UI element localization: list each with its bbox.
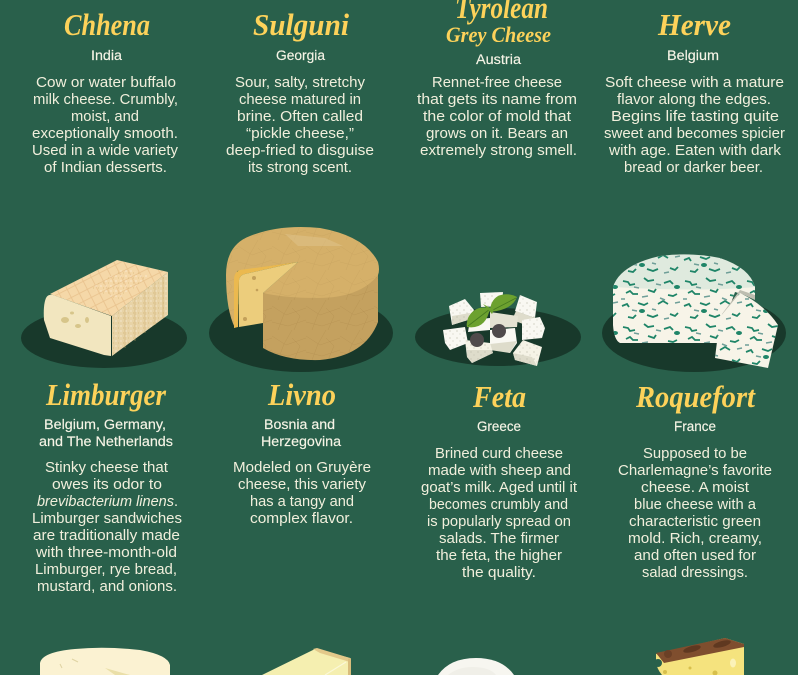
- description: Limburger: owes its odor to: [52, 477, 162, 493]
- origin: Bosnia and Herzegovina: [261, 417, 342, 449]
- description: Livno: complex flavor.: [250, 511, 353, 527]
- description: Herve: flavor along the edges.: [617, 92, 771, 108]
- description: Feta: goat’s milk. Aged until it: [421, 480, 577, 496]
- description: Roquefort: [618, 446, 772, 581]
- description: Sulguni: brine. Often called: [237, 109, 363, 125]
- origin: India: India: [91, 48, 123, 63]
- panel: Tyrolean Grey Cheese: [417, 0, 577, 159]
- illustration: Livno wheel: [209, 227, 393, 372]
- description: Roquefort: characteristic green: [629, 514, 761, 530]
- description: Feta: the quality.: [462, 565, 536, 581]
- description: Feta: [421, 446, 577, 581]
- description: Limburger: Limburger, rye bread,: [35, 562, 177, 578]
- description: Livno: cheese, this variety: [238, 477, 367, 493]
- origin: Bosnia and Herzegovina: Bosnia and: [264, 417, 335, 432]
- description: Sulguni: its strong scent.: [248, 160, 352, 176]
- description: Livno: Modeled on Gruyère: [233, 460, 371, 476]
- description: Feta: is popularly spread on: [427, 514, 571, 530]
- panel: Chhena: [32, 7, 179, 176]
- description: Tyrolean Grey Cheese: Rennet-free cheese: [432, 75, 562, 91]
- description: Tyrolean Grey Cheese: extremely strong smell.: [420, 143, 577, 159]
- description: Limburger: brevibacterium linens.: [37, 494, 178, 510]
- description: Roquefort: Charlemagne’s favorite: [618, 463, 772, 479]
- description: Roquefort: and often used for: [634, 548, 756, 564]
- description: Tyrolean Grey Cheese: the color of mold that: [423, 109, 571, 125]
- description: Limburger: [32, 460, 182, 595]
- heading: Livno: Livno: [267, 377, 336, 412]
- description: Limburger: are traditionally made: [33, 528, 180, 544]
- heading: Sulguni: Sulguni: [253, 7, 349, 42]
- description: Chhena: of Indian desserts.: [44, 160, 167, 176]
- illustration: Feta cubes with basil and olives: [415, 292, 581, 366]
- heading: Tyrolean Grey Cheese: Grey Cheese: [446, 22, 551, 47]
- description: Sulguni: cheese matured in: [239, 92, 361, 108]
- description: Sulguni: Sour, salty, stretchy: [235, 75, 366, 91]
- description: Herve: with age. Eaten with dark: [608, 143, 782, 159]
- description: Feta: the feta, the higher: [436, 548, 562, 564]
- description: Sulguni: [226, 75, 374, 176]
- description: Tyrolean Grey Cheese: [417, 75, 577, 159]
- panel: Livno: [209, 227, 393, 527]
- description: Chhena: Cow or water buffalo: [36, 75, 176, 91]
- description: Limburger: Stinky cheese that: [45, 460, 168, 476]
- heading: Roquefort: Roquefort: [635, 379, 756, 414]
- description: Livno: has a tangy and: [250, 494, 354, 510]
- origin: Belgium: Belgium: [667, 48, 719, 63]
- heading: Limburger: Limburger: [45, 377, 167, 412]
- panel: Herve: [604, 7, 785, 176]
- description: Chhena: milk cheese. Crumbly,: [33, 92, 178, 108]
- description: Limburger: Limburger sandwiches: [32, 511, 182, 527]
- origin: Georgia: Georgia: [276, 48, 325, 63]
- description: Livno: [233, 460, 371, 527]
- illustration: white round cheese (cropped): [438, 658, 514, 675]
- description: Sulguni: deep-fried to disguise: [226, 143, 374, 159]
- illustration: pale round cheese (cropped): [40, 648, 170, 675]
- description: Roquefort: cheese. A moist: [641, 480, 749, 496]
- heading: Feta: Feta: [472, 379, 526, 414]
- description: Herve: [604, 75, 785, 176]
- panel: Sulguni: [226, 7, 374, 176]
- panel: Feta: [415, 292, 581, 581]
- description: Limburger: with three-month-old: [35, 545, 177, 561]
- illustration: Swiss-style block (cropped): [654, 638, 744, 675]
- origin: Belgium, Germany, and The Netherlands: [39, 417, 173, 449]
- description: Roquefort: salad dressings.: [642, 565, 748, 581]
- description: Roquefort: blue cheese with a: [634, 497, 757, 513]
- description: Feta: made with sheep and: [428, 463, 571, 479]
- panel: Limburger: [21, 260, 187, 595]
- description: Herve: bread or darker beer.: [624, 160, 763, 176]
- origin: Belgium, Germany, and The Netherlands: Belgium, Germany,: [44, 417, 166, 432]
- description: Chhena: Used in a wide variety: [32, 143, 179, 159]
- description: Chhena: moist, and: [71, 109, 139, 125]
- description: Herve: Begins life tasting quite: [611, 109, 779, 125]
- illustration: cheese wedge (cropped): [262, 648, 351, 675]
- illustration: Roquefort wheel and wedge: [602, 254, 786, 372]
- heading: Tyrolean Grey Cheese: [446, 0, 551, 47]
- description: Chhena: exceptionally smooth.: [32, 126, 178, 142]
- description: Chhena: [32, 75, 179, 176]
- description: Tyrolean Grey Cheese: that gets its name from: [417, 92, 577, 108]
- heading: Chhena: Chhena: [64, 7, 150, 42]
- description: Feta: Brined curd cheese: [435, 446, 563, 462]
- description: Feta: becomes crumbly and: [429, 497, 568, 513]
- origin: Belgium, Germany, and The Netherlands: and The Netherlands: [39, 434, 173, 449]
- description: Herve: sweet and becomes spicier: [604, 126, 785, 142]
- origin: Greece: Greece: [477, 419, 521, 434]
- description: Limburger: mustard, and onions.: [37, 579, 177, 595]
- origin: France: France: [674, 419, 716, 434]
- panel: Roquefort: [602, 254, 786, 581]
- heading: Herve: Herve: [657, 7, 731, 42]
- origin: Austria: Austria: [476, 52, 522, 67]
- description: Feta: salads. The firmer: [439, 531, 559, 547]
- description: Roquefort: mold. Rich, creamy,: [628, 531, 762, 547]
- illustration: Limburger block: [21, 260, 187, 368]
- description: Herve: Soft cheese with a mature: [605, 75, 784, 91]
- description: Tyrolean Grey Cheese: grows on it. Bears an: [426, 126, 568, 142]
- origin: Bosnia and Herzegovina: Herzegovina: [261, 434, 342, 449]
- description: Sulguni: “pickle cheese,”: [246, 126, 354, 142]
- description: Roquefort: Supposed to be: [643, 446, 747, 462]
